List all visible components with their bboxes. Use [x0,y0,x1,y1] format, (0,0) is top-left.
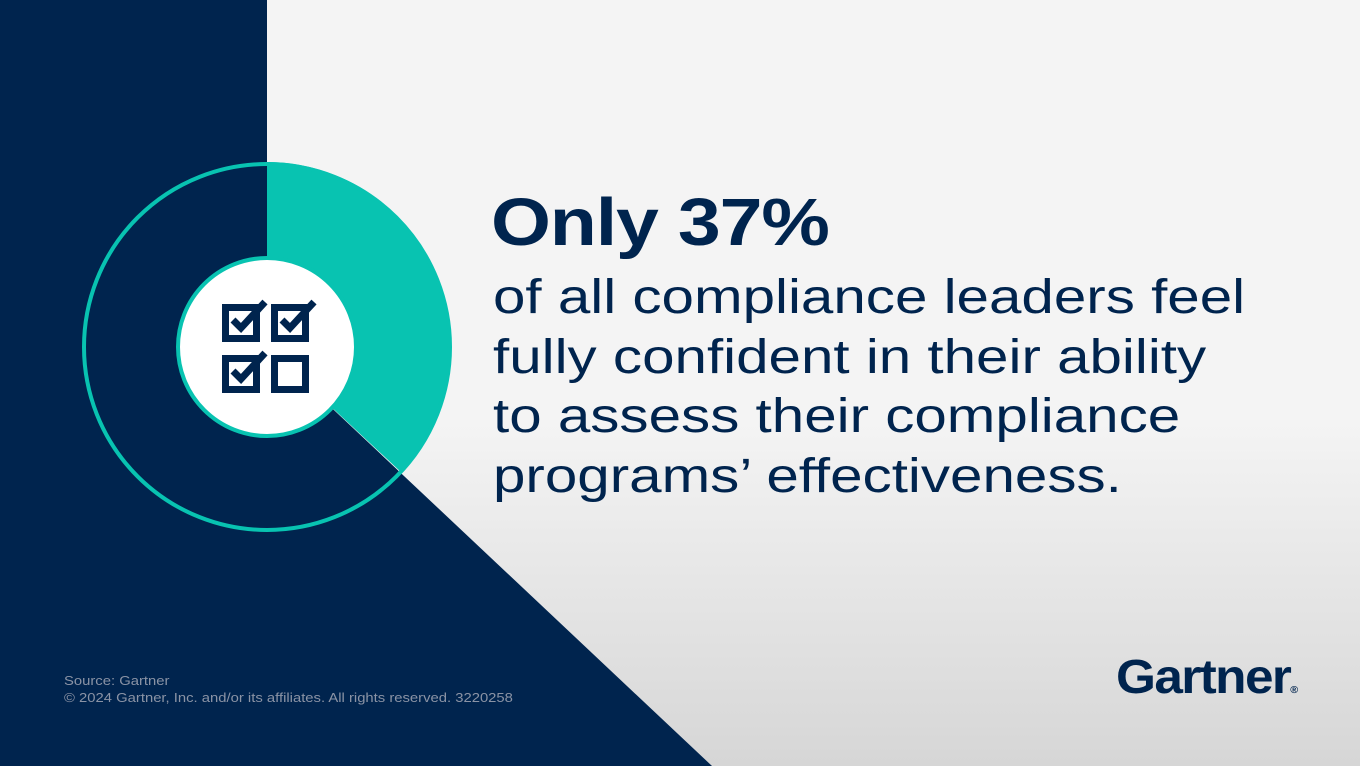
body text: of all compliance leaders feel [493,271,1245,324]
icon: checklist [178,258,356,436]
body text: to assess their compliance [493,390,1180,443]
pie wedge 37% [84,162,452,530]
logo: Gartner: Gartner® [1116,651,1298,704]
body text: fully confident in their ability [493,330,1206,384]
body text: programs’ effectiveness. [493,450,1122,502]
source note: Source: Gartner [64,673,169,688]
title: Only 37% [491,185,829,260]
source note: © 2024 Gartner, Inc. and/or its affiliates. All rights reserved. 3220258 [64,690,513,705]
body text [493,271,1245,502]
source note [64,673,513,705]
